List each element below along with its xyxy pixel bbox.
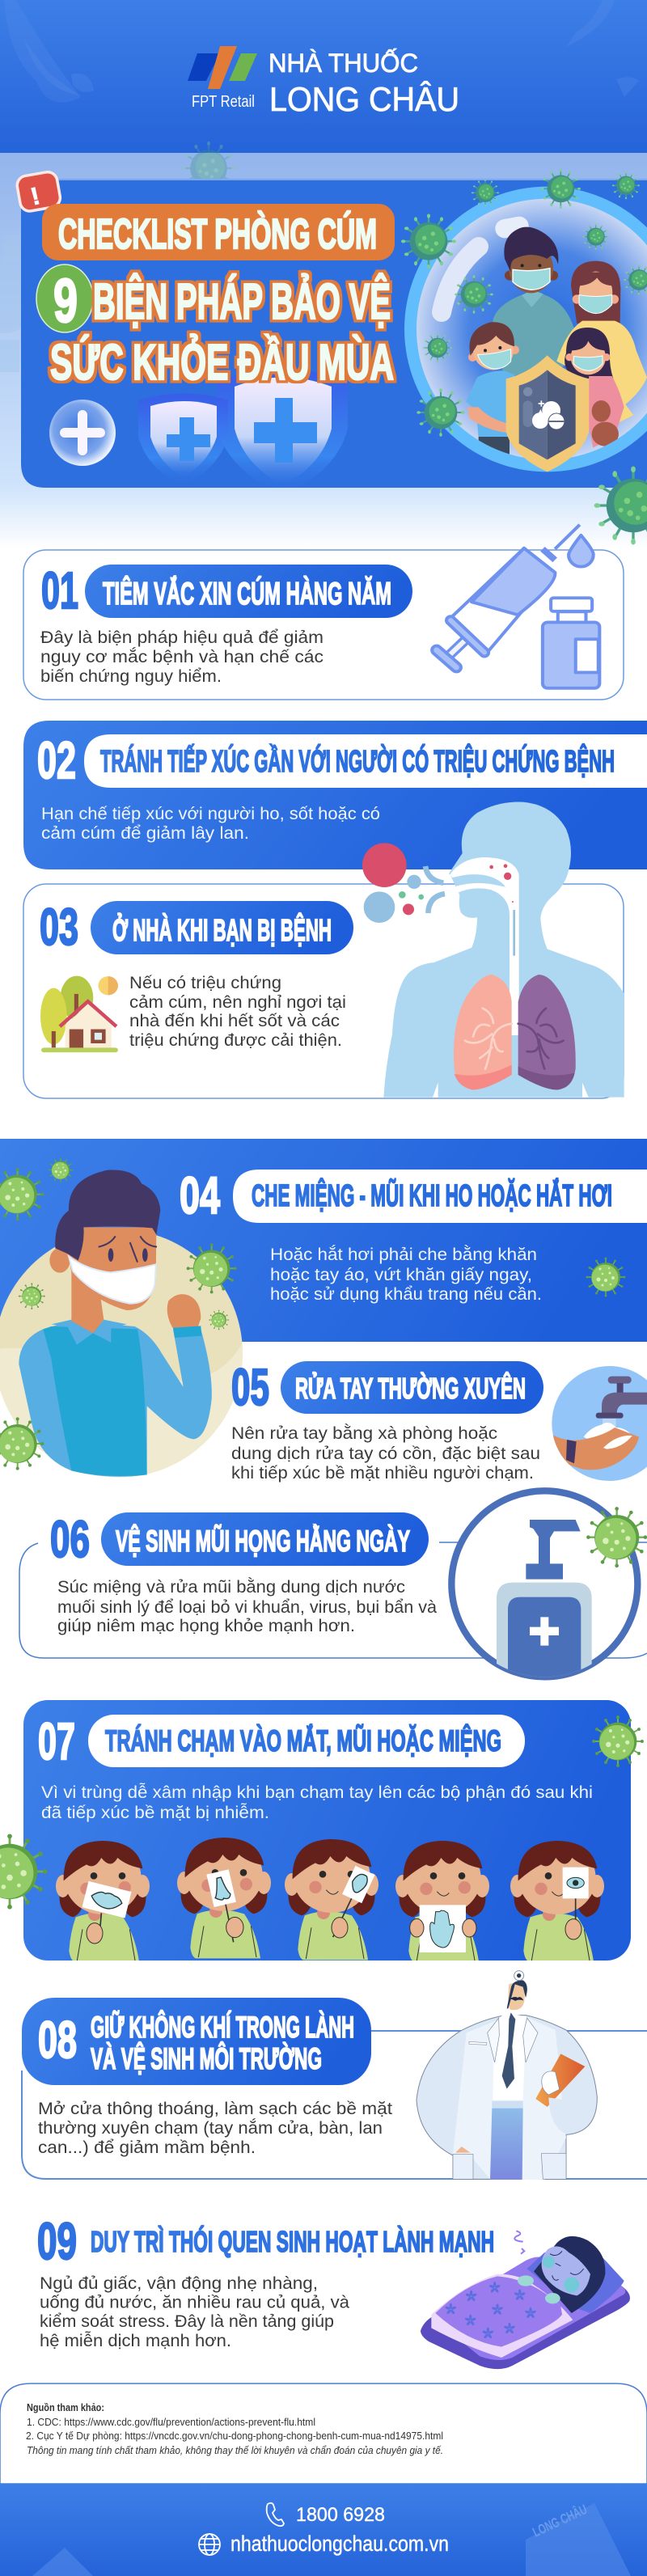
phone number: 1800 6928 xyxy=(296,2504,385,2526)
text 04: hoặc tay áo, vứt khăn giấy ngay, xyxy=(270,1266,532,1284)
text 09: kiểm soát stress. Đây là nền tảng giúp xyxy=(40,2312,334,2331)
heading pill 06 xyxy=(101,1512,429,1566)
store illustration: LONG CHÂU xyxy=(531,2502,590,2540)
panel 01 xyxy=(23,550,624,700)
icon: house xyxy=(40,976,118,1052)
title line 2: BIỆN PHÁP BẢO VỆ xyxy=(93,274,391,330)
text 08: thường xuyên chạm (tay nắm cửa, bàn, lan xyxy=(38,2119,383,2138)
text 01 xyxy=(40,628,324,686)
heading pill 08: VÀ VỆ SINH MÔI TRƯỜNG xyxy=(91,2041,322,2075)
heading pill 06: VỆ SINH MŨI HỌNG HẰNG NGÀY xyxy=(116,1524,410,1558)
panel 08 xyxy=(22,1998,647,2179)
icon: large shield xyxy=(217,371,348,477)
logo: FPT Retail xyxy=(188,46,257,111)
references card xyxy=(0,2384,647,2484)
icon: virus right xyxy=(592,1715,644,1767)
text 05: dung dịch rửa tay có cồn, đặc biệt sau xyxy=(231,1445,540,1463)
icon: virus xyxy=(586,1507,647,1567)
text 09: uống đủ nước, ăn nhiều rau củ quả, và xyxy=(40,2294,349,2312)
kid with nose card xyxy=(177,1838,271,1958)
kid with eye card xyxy=(510,1841,604,1961)
panel 02 xyxy=(23,721,647,869)
number 06: 06 xyxy=(50,1510,90,1568)
text 09 xyxy=(40,2274,349,2350)
panel 03 xyxy=(23,884,624,1098)
number 07: 07 xyxy=(38,1712,75,1770)
logo: FPT Retail: FPT Retail xyxy=(192,93,255,111)
kid with mouth card xyxy=(56,1841,150,1961)
hero background xyxy=(0,142,647,549)
logo wordmark xyxy=(269,49,459,118)
virus group xyxy=(0,1157,237,1470)
number 09: 09 xyxy=(37,2212,77,2270)
text 05: Nên rửa tay bằng xà phòng hoặc xyxy=(231,1424,497,1443)
virus group xyxy=(401,169,647,437)
text 05 xyxy=(231,1424,540,1483)
text 01: nguy cơ mắc bệnh và hạn chế các xyxy=(40,648,324,666)
text 03: nhà đến khi hết sốt và các xyxy=(129,1012,340,1030)
panel 04 xyxy=(0,1139,647,1342)
illustration: respiratory system xyxy=(362,802,624,1098)
icon: virus xyxy=(586,1257,626,1297)
father xyxy=(493,227,574,378)
references card: Nguồn tham khảo: xyxy=(27,2401,104,2413)
panel 05 xyxy=(231,1358,543,1483)
text 07: đã tiếp xúc bề mặt bị nhiễm. xyxy=(41,1804,269,1822)
title line 2 xyxy=(36,264,391,336)
illustration: doctor xyxy=(417,1971,597,2180)
number 05: 05 xyxy=(231,1358,269,1416)
text 08: can...) để giảm mầm bệnh. xyxy=(38,2138,256,2157)
text 06: giúp niêm mạc họng khỏe mạnh hơn. xyxy=(57,1617,355,1635)
icon: alert badge: ! xyxy=(28,183,43,210)
logo wordmark: NHÀ THUỐC xyxy=(269,49,418,78)
illustration: sleeping person xyxy=(421,2231,630,2369)
references card: Thông tin mang tính chất tham khảo, không thay thế lời khuyên và chẩn đoán của chuyên gia y tế. xyxy=(27,2444,443,2456)
heading pill 08: GIỮ KHÔNG KHÍ TRONG LÀNH xyxy=(91,2010,354,2044)
text 01: biến chứng nguy hiểm. xyxy=(40,667,222,686)
references card: 1. CDC: https://www.cdc.gov/flu/prevention/actions-prevent-flu.html xyxy=(27,2416,315,2428)
girl xyxy=(565,328,624,447)
number 04: 04 xyxy=(180,1166,220,1225)
airflow arrows xyxy=(425,866,514,956)
hero panel xyxy=(15,171,647,493)
icon: alert badge xyxy=(15,171,61,213)
panel 06 xyxy=(19,1510,647,1658)
text 07 xyxy=(41,1783,593,1822)
icon: phone xyxy=(267,2503,284,2526)
text 07: Vì vi trùng dễ xâm nhập khi bạn chạm tay lên các bộ phận đó sau khi xyxy=(41,1783,593,1802)
number 02: 02 xyxy=(37,731,76,789)
heading pill 07 xyxy=(88,1715,525,1767)
title box xyxy=(42,204,395,260)
icon: syringe and vial xyxy=(437,525,599,688)
kid with hand card xyxy=(395,1841,489,1961)
text 03: Nếu có triệu chứng xyxy=(129,974,281,992)
text 06: muối sinh lý để loại bỏ vi khuẩn, virus, bụi bẩn và xyxy=(57,1598,437,1617)
icon: small shield xyxy=(138,393,228,472)
text 01: Đây là biện pháp hiệu quả để giảm xyxy=(40,628,324,647)
heading pill 02 xyxy=(84,734,647,788)
lungs xyxy=(454,975,576,1089)
website: nhathuoclongchau.com.vn xyxy=(230,2532,449,2556)
footer xyxy=(0,2484,647,2576)
heading pill 03: Ở NHÀ KHI BẠN BỊ BỆNH xyxy=(112,912,332,948)
heading pill 01 xyxy=(85,565,412,618)
icon: virus left xyxy=(0,1834,48,1910)
heading pill 08: 08 xyxy=(38,2011,77,2069)
title line 2: 9 xyxy=(53,267,78,336)
logo wordmark: LONG CHÂU xyxy=(269,80,459,118)
panel 09 xyxy=(37,2212,494,2350)
store illustration xyxy=(32,2502,631,2576)
header band xyxy=(0,0,647,153)
panel 07 xyxy=(0,1700,644,1961)
mother xyxy=(556,261,647,434)
text 04: hoặc sử dụng khẩu trang nếu cần. xyxy=(270,1285,542,1304)
heading pill 05 xyxy=(281,1361,543,1414)
text 04: Hoặc hắt hơi phải che bằng khăn xyxy=(270,1246,537,1264)
particles xyxy=(362,843,514,923)
text 08 xyxy=(38,2100,392,2157)
text 08: Mở cửa thông thoáng, làm sạch các bề mặt xyxy=(38,2100,392,2118)
heading pill 04 xyxy=(233,1170,647,1223)
icon: sanitizer bottle xyxy=(451,1491,647,1682)
text 02: Hạn chế tiếp xúc với người ho, sốt hoặc có xyxy=(41,805,380,823)
icon: globe xyxy=(199,2534,220,2555)
text 02: cảm cúm để giảm lây lan. xyxy=(41,824,249,843)
icon: virus hero corner xyxy=(594,467,647,544)
text 06: Súc miệng và rửa mũi bằng dung dịch nước xyxy=(57,1578,405,1597)
heading pill 03 xyxy=(91,901,353,954)
text 05: khi tiếp xúc bề mặt nhiều người chạm. xyxy=(231,1464,534,1483)
heading pill 08 xyxy=(22,1998,371,2085)
kid with ear card xyxy=(285,1839,378,1960)
icon: gold shield xyxy=(506,355,589,472)
text 04 xyxy=(270,1246,542,1304)
text 09: hệ miễn dịch mạnh hơn. xyxy=(40,2332,231,2350)
title line 3: SỨC KHỎE ĐẦU MÙA xyxy=(50,335,394,391)
icon: plus ball xyxy=(49,400,116,466)
text 03 xyxy=(129,974,346,1050)
text 03: cảm cúm, nên nghỉ ngơi tại xyxy=(129,993,346,1012)
text 03: triệu chứng được cải thiện. xyxy=(129,1031,342,1050)
references card: 2. Cục Y tế Dự phòng: https://vncdc.gov.vn/chu-dong-phong-chong-benh-cum-mua-nd14975.html xyxy=(26,2430,443,2442)
text 09: Ngủ đủ giấc, vận động nhẹ nhàng, xyxy=(40,2274,318,2293)
illustration: family in protective bubble xyxy=(401,169,647,472)
illustration: kids xyxy=(56,1838,604,1961)
illustration: coughing man xyxy=(0,1157,248,1480)
number 01: 01 xyxy=(41,561,78,620)
icon: hand washing xyxy=(552,1366,647,1481)
number 03: 03 xyxy=(40,898,78,956)
heading pill 01: TIÊM VẮC XIN CÚM HÀNG NĂM xyxy=(103,576,391,611)
title box: CHECKLIST PHÒNG CÚM xyxy=(58,211,377,258)
boy xyxy=(466,322,519,461)
text 06 xyxy=(57,1578,437,1635)
text 02 xyxy=(41,805,380,843)
